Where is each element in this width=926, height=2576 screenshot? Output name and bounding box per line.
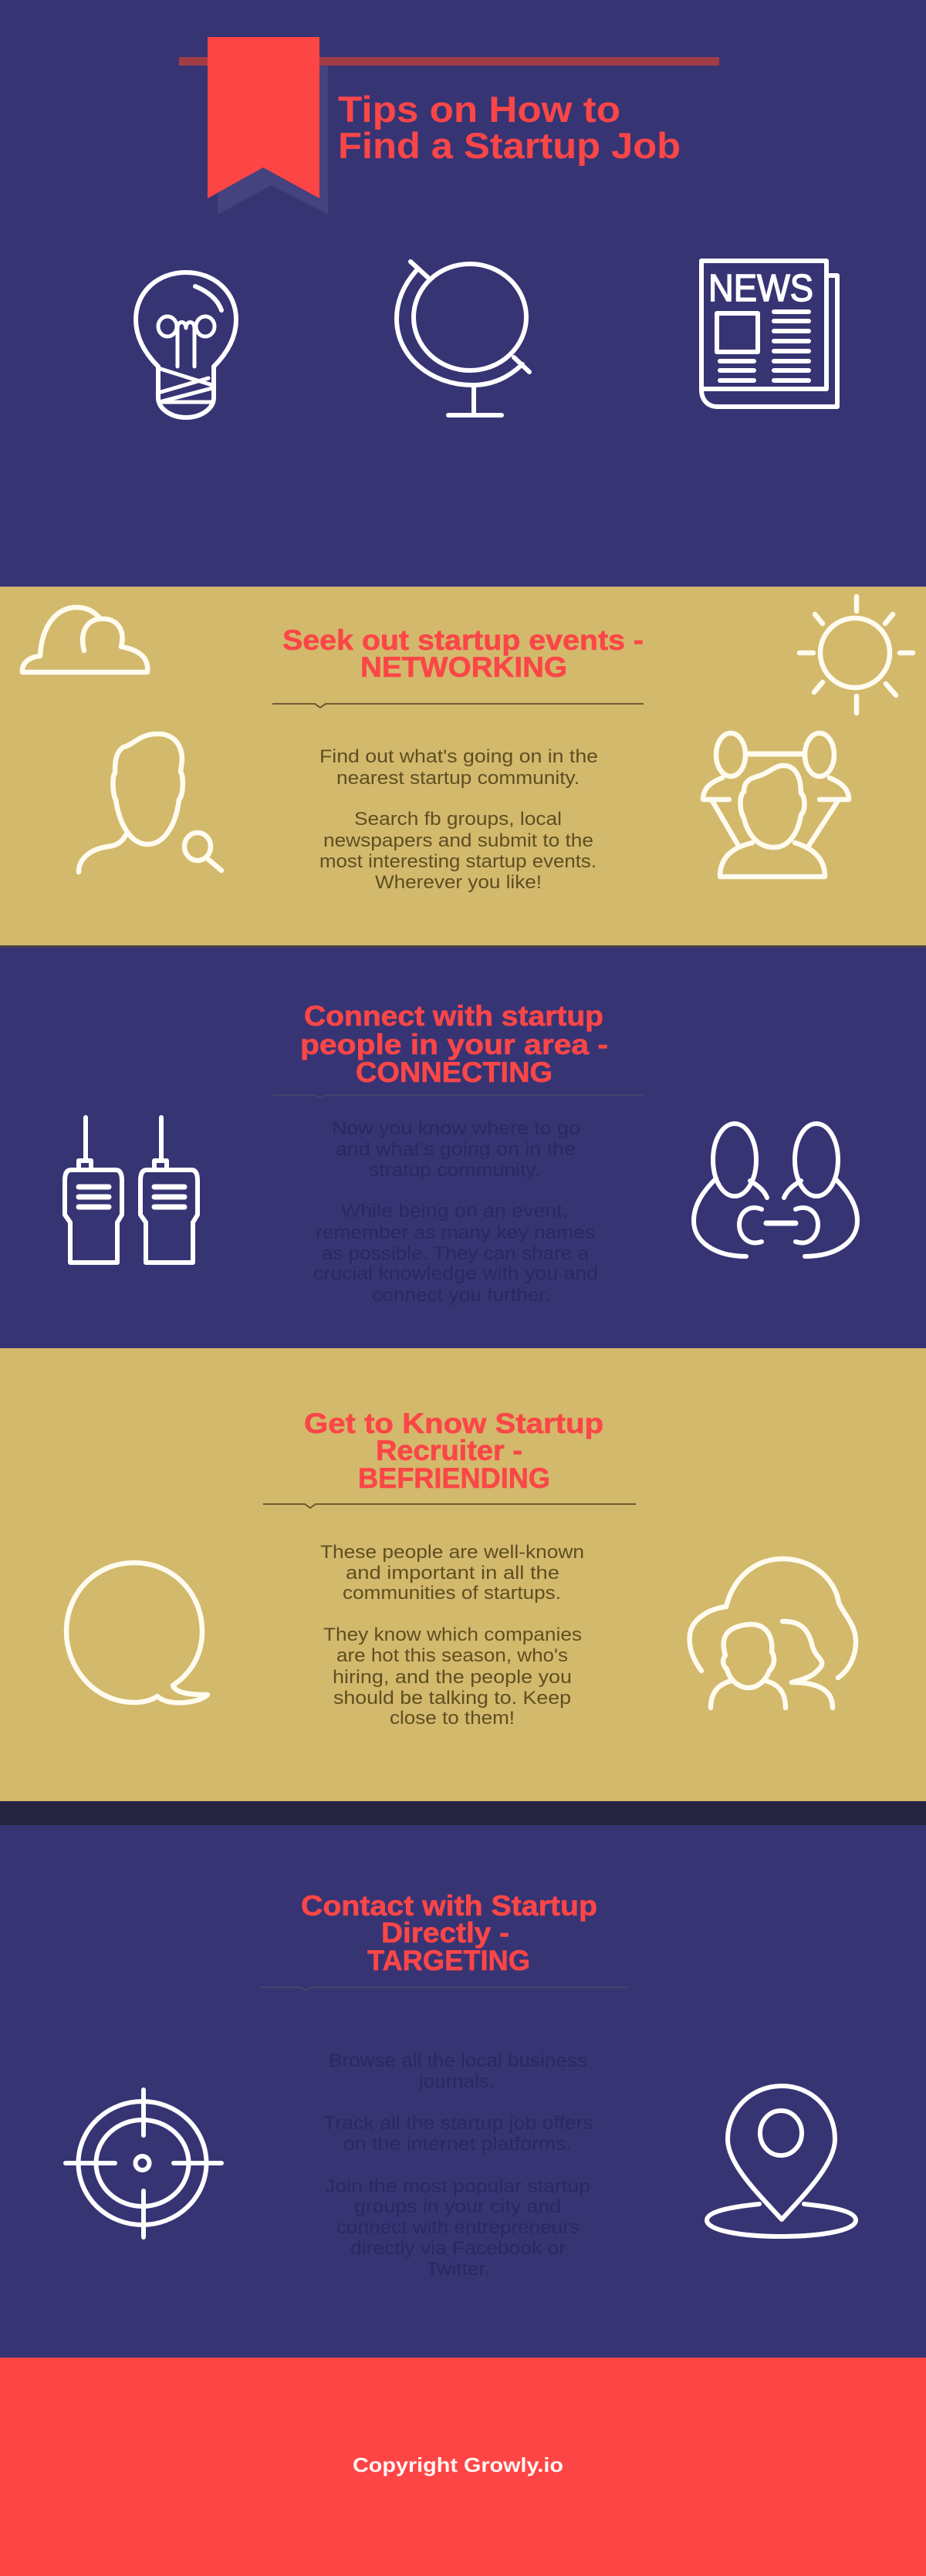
icon: sun [799,597,913,713]
text: targeting body: connect with entrepreneurs [336,2217,580,2238]
text: targeting body: Twitter. [426,2259,490,2280]
panel: networking background [0,587,926,945]
heading: befriending: BEFRIENDING [358,1462,550,1494]
heading: networking [282,624,644,683]
icon: walkie talkies [65,1117,198,1263]
text: connecting body [313,1118,598,1306]
heading: targeting: TARGETING [367,1945,530,1976]
text: targeting body: on the internet platforms. [343,2134,572,2155]
panel: header background [0,0,926,587]
text: networking body: most interesting startup events. [319,851,596,872]
heading: networking: Seek out startup events - [282,624,644,656]
text: connecting body: remember as many key names [316,1222,595,1243]
text: targeting body [323,2050,593,2280]
heading: befriending: Recruiter - [376,1435,522,1466]
title ribbon [179,37,719,215]
text: befriending body: close to them! [390,1708,515,1729]
text: targeting body: Track all the startup job offers [323,2113,593,2134]
heading: targeting: Directly - [381,1917,509,1949]
text: networking body [319,746,598,893]
text: connecting body: crucial knowledge with you and [313,1263,598,1284]
icon: target crosshair [66,2090,221,2237]
text: befriending body: These people are well-known [320,1542,584,1563]
heading: targeting [301,1890,597,1976]
text: befriending body: and important in all the [346,1563,559,1584]
text: targeting body: journals. [418,2071,495,2092]
panel: targeting background [0,1825,926,2358]
heading: connecting: Connect with startup [304,1000,603,1032]
heading: networking: NETWORKING [360,651,567,683]
text: befriending body [320,1542,584,1729]
icon: globe [397,262,529,415]
divider [272,1095,644,1098]
text: targeting body: groups in your city and [354,2196,561,2217]
text: connecting body: and what's going on in the [336,1139,576,1160]
icon: light bulb [136,272,236,418]
text: targeting body: Join the most popular startup [325,2176,590,2197]
panel: footer background [0,2358,926,2576]
icon: map pin [707,2086,856,2236]
title: Find a Startup Job [338,125,681,166]
icon: people in cloud [690,1559,856,1708]
text: connecting body: as possible. They can share a [322,1243,590,1264]
divider [260,1987,629,1990]
title [338,89,681,166]
icon: team people [703,733,849,877]
text: connecting body: connect you further. [372,1285,550,1306]
text: networking body: Find out what's going on in the [319,746,598,767]
icon: connected people [694,1124,857,1256]
divider [263,1504,636,1508]
text: networking body: newspapers and submit to the [323,830,593,851]
text: befriending body: should be talking to. Keep [333,1688,571,1709]
text: connecting body: While being on an event, [341,1201,568,1222]
text: befriending body: They know which companies [323,1624,582,1645]
text: befriending body: communities of startups. [343,1583,561,1604]
heading: befriending [304,1408,603,1494]
icon: person searching [79,734,221,872]
text: befriending body: are hot this season, who's [336,1645,568,1666]
panel: befriending background [0,1348,926,1801]
heading: connecting: people in your area - [300,1029,608,1060]
title: Tips on How to [338,89,620,130]
icon: cloud [22,607,147,672]
text: networking body: Wherever you like! [375,872,542,893]
icon: newspaper [701,261,837,407]
text: connecting body: Now you know where to go [332,1118,580,1139]
icon: speech bubble [66,1563,208,1703]
heading: targeting: Contact with Startup [301,1890,597,1922]
icon: newspaper: NEWS [708,268,813,309]
text: connecting body: stratup community. [369,1160,540,1181]
heading: connecting [300,1000,608,1088]
text: targeting body: Browse all the local business [329,2050,587,2071]
heading: befriending: Get to Know Startup [304,1408,603,1439]
text: networking body: Search fb groups, local [354,809,562,830]
divider [272,704,644,708]
panel: connecting background [0,945,926,1348]
text: networking body: nearest startup community. [336,768,580,789]
text: targeting body: directly via Facebook or [350,2238,566,2259]
footer text: Copyright Growly.io [353,2453,563,2476]
band: dark separator [0,1801,926,1825]
heading: connecting: CONNECTING [356,1056,553,1088]
text: befriending body: hiring, and the people you [333,1667,572,1688]
